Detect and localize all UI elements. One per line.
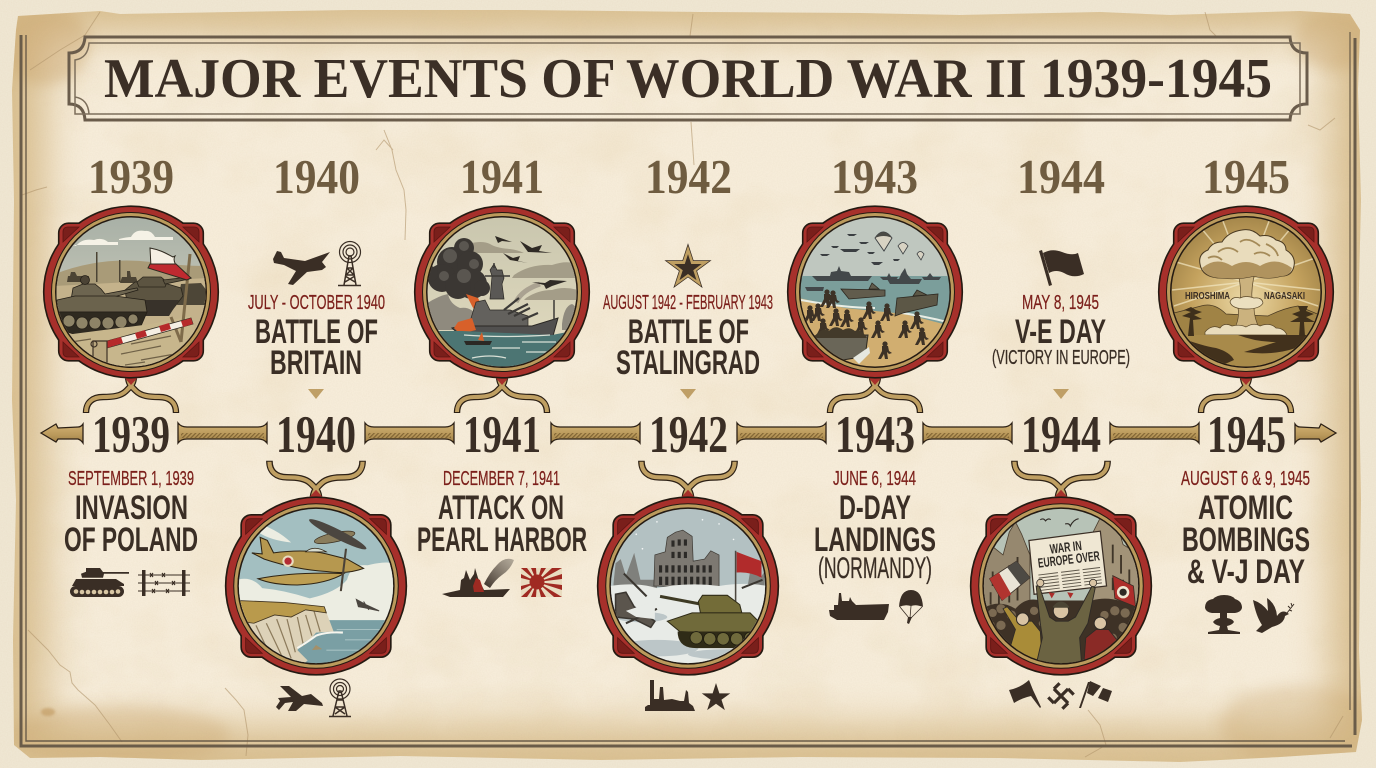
subheading: (VICTORY IN EUROPE) — [992, 347, 1130, 369]
date: SEPTEMBER 1, 1939 — [68, 468, 194, 490]
heading: & V-J DAY — [1187, 553, 1305, 591]
arrow right — [1295, 424, 1336, 443]
medallion: 1945 mushroom cloud — [1160, 207, 1332, 413]
medallion: 1945 mushroom cloud: HIROSHIMA — [1185, 291, 1230, 302]
subheading: (NORMANDY) — [818, 552, 932, 585]
title: MAJOR EVENTS OF WORLD WAR II 1939-1945 — [104, 48, 1272, 110]
heading: ATTACK ON — [438, 489, 564, 527]
panel: 1944 V-E Day — [992, 250, 1130, 399]
icon: plane — [273, 251, 330, 285]
heading: BATTLE OF — [628, 313, 749, 351]
far tank — [177, 283, 207, 305]
medallion: 1940 Spitfires over cliffs — [226, 461, 406, 674]
timeline year labels: 1945 — [1207, 406, 1286, 464]
main tank — [57, 276, 147, 334]
icon: barbed wire — [138, 570, 190, 596]
heading: BRITAIN — [270, 344, 362, 382]
marker — [1053, 389, 1069, 399]
timeline year labels: 1941 — [463, 406, 541, 464]
medallion: 1944 victory crowd: WAR IN — [1049, 538, 1083, 557]
medallion: 1941 Pearl Harbor battleship — [416, 207, 588, 413]
heading: PEARL HARBOR — [417, 521, 587, 559]
timeline year labels: 1940 — [276, 406, 356, 464]
icon: star — [702, 683, 730, 710]
heading: D-DAY — [839, 489, 911, 527]
timeline year labels: 1943 — [835, 406, 915, 464]
top year headings: 1944 — [1017, 149, 1105, 204]
date: MAY 8, 1945 — [1022, 292, 1099, 314]
icon: radio tower — [338, 242, 361, 286]
date: DECEMBER 7, 1941 — [443, 468, 560, 490]
panel: 1945 atomic bombings and V-J Day — [1181, 468, 1310, 634]
top year headings: 1943 — [831, 149, 918, 204]
date: JULY - OCTOBER 1940 — [248, 292, 385, 314]
panel: 1940 battle of Britain — [248, 242, 385, 399]
heading: STALINGRAD — [616, 344, 760, 382]
medallion: 1939 invasion of Poland — [44, 207, 218, 413]
icon: rising sun flag — [521, 568, 562, 597]
heading — [64, 489, 198, 559]
heading: ATOMIC — [1198, 489, 1293, 527]
heading — [255, 313, 378, 382]
panel: 1943 D-Day landings — [814, 468, 936, 624]
timeline year labels: 1939 — [92, 406, 170, 464]
date: AUGUST 1942 - FEBRUARY 1943 — [603, 292, 773, 314]
top year headings: 1945 — [1202, 149, 1290, 204]
panel: 1942 battle of Stalingrad — [603, 248, 773, 399]
icon: factory — [645, 680, 695, 711]
arrow left — [41, 424, 83, 443]
upper plane — [314, 530, 356, 544]
medallion: 1944 victory crowd — [971, 461, 1151, 674]
top year headings: 1940 — [273, 149, 360, 204]
marker — [308, 389, 324, 399]
icon: tank — [70, 568, 129, 597]
marker — [680, 389, 696, 399]
icon: torn flag — [1079, 681, 1112, 708]
date: JUNE 6, 1944 — [833, 468, 916, 490]
date: AUGUST 6 & 9, 1945 — [1181, 468, 1310, 490]
heading — [1182, 489, 1310, 591]
medallion: 1942 Stalingrad ruins and tank — [598, 461, 778, 674]
top year headings: 1941 — [460, 149, 544, 204]
heading: BATTLE OF — [255, 313, 378, 351]
icon: swastika — [1047, 682, 1075, 710]
heading — [814, 489, 936, 559]
timeline year labels: 1944 — [1021, 406, 1101, 464]
timeline year labels: 1942 — [649, 406, 728, 464]
heading — [417, 489, 587, 559]
icon: star — [669, 248, 707, 284]
icon: plane — [276, 686, 323, 711]
icon: flag — [1009, 680, 1041, 708]
medallion: 1945 mushroom cloud: NAGASAKI — [1264, 291, 1305, 302]
icon: flag — [1039, 250, 1084, 286]
icon: parachute — [899, 590, 923, 624]
heading: V-E DAY — [1015, 313, 1106, 351]
icon: mushroom cloud — [1205, 595, 1242, 634]
icon: radio tower — [329, 679, 351, 716]
medallion: 1943 D-Day beach — [788, 207, 962, 413]
icon: dove — [1253, 598, 1294, 633]
top year headings: 1942 — [645, 149, 732, 204]
timeline year labels — [92, 406, 1286, 464]
heading: BOMBINGS — [1182, 521, 1310, 559]
heading: LANDINGS — [814, 521, 936, 559]
top year headings: 1939 — [88, 149, 174, 204]
heading: INVASION — [75, 489, 188, 527]
medallion: 1944 victory crowd: EUROPE OVER — [1037, 548, 1101, 571]
title banner — [69, 37, 1307, 120]
icon: burning ship — [442, 559, 514, 597]
top year headings — [88, 149, 1290, 204]
heading — [616, 313, 760, 382]
panel: 1939 invasion of Poland — [64, 468, 198, 597]
panel: 1941 attack on Pearl Harbor — [417, 468, 587, 597]
icon: landing ship — [829, 593, 889, 620]
heading: OF POLAND — [64, 521, 198, 559]
timeline bar — [41, 406, 1336, 464]
main plane — [252, 537, 364, 573]
